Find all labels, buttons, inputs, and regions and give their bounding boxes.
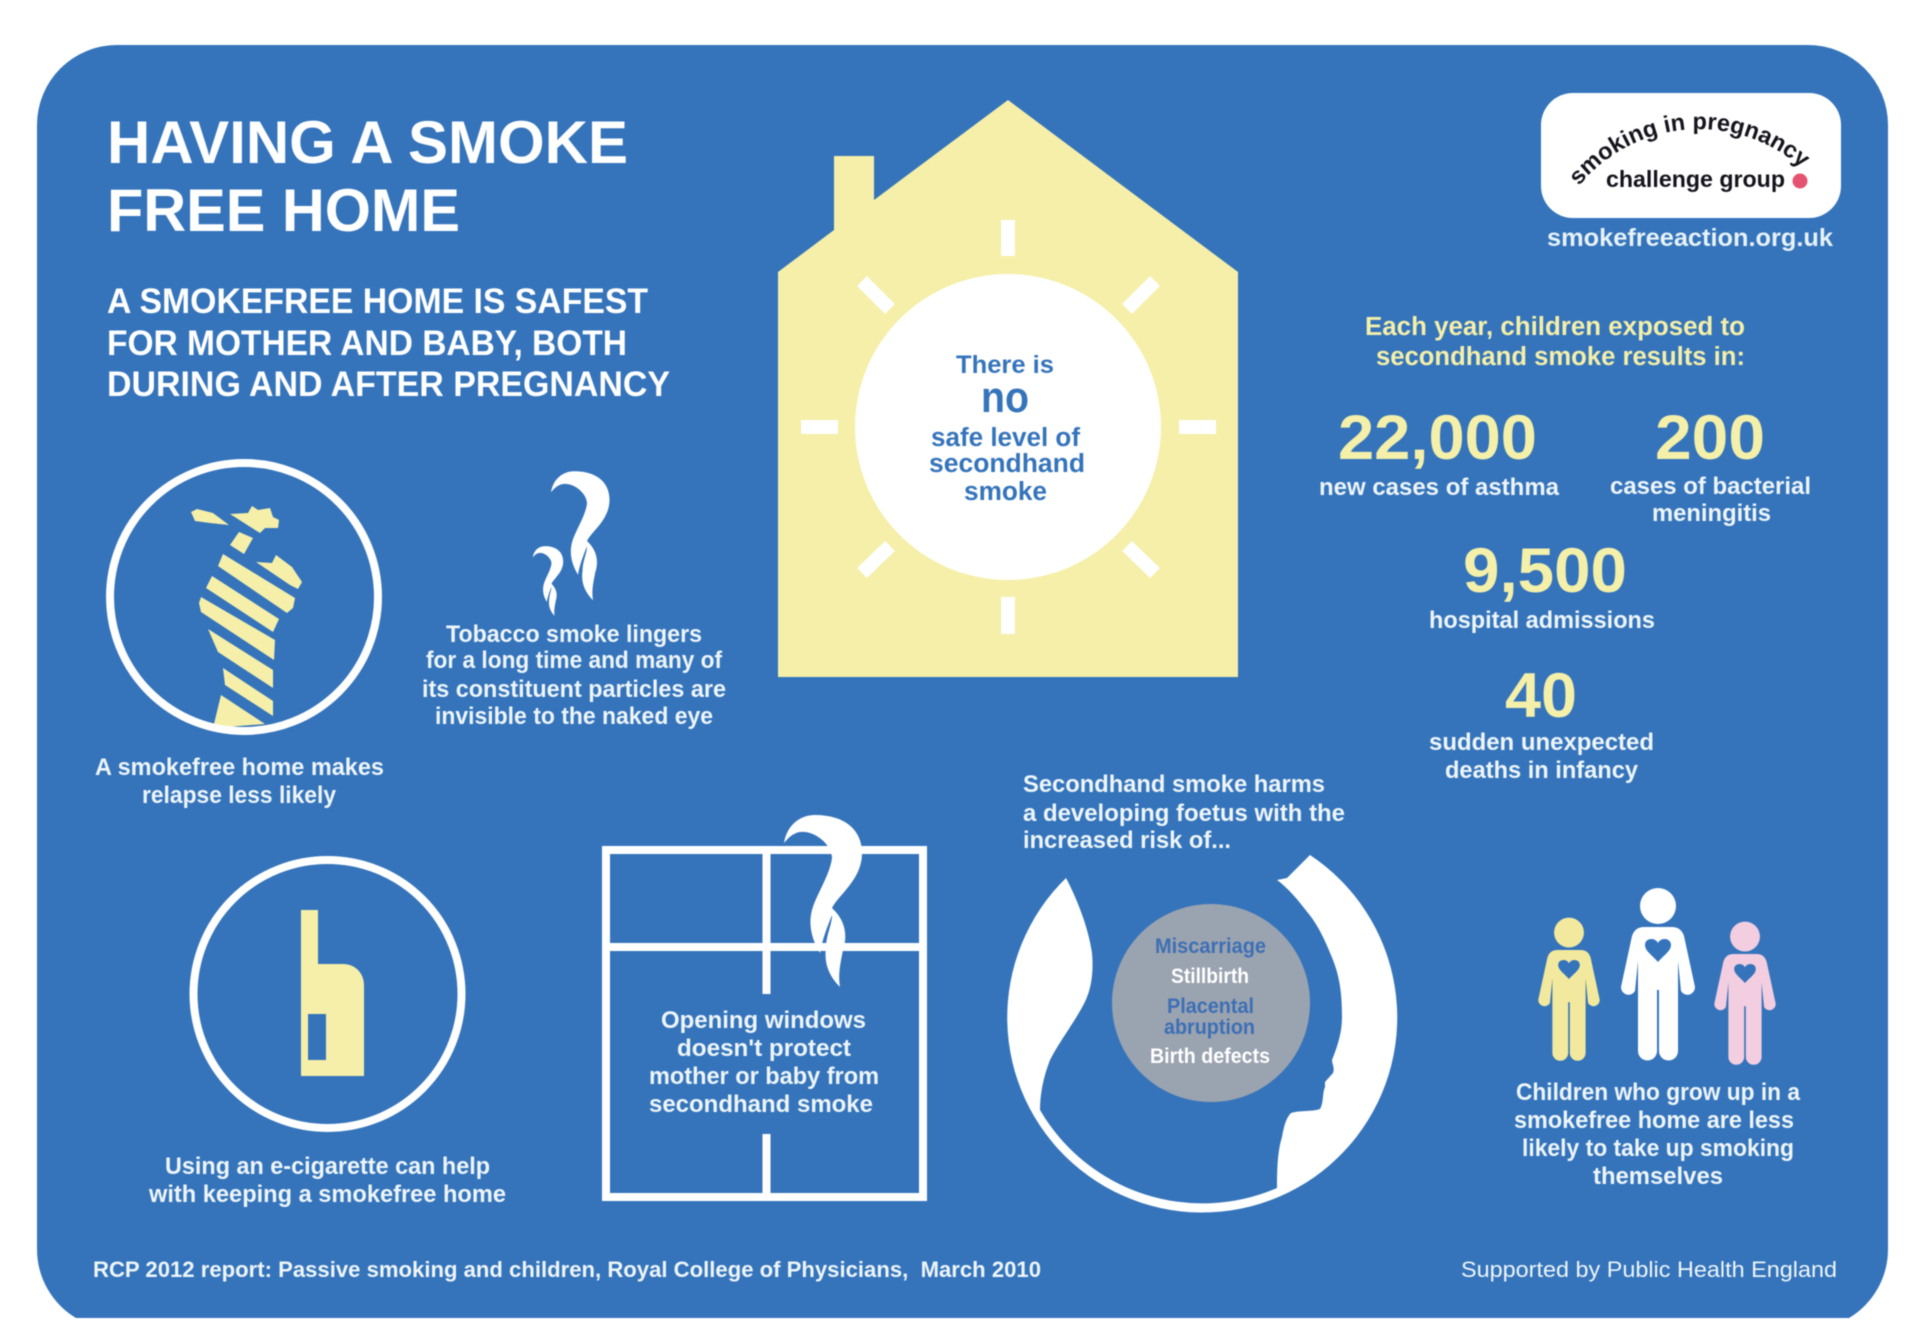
text: e-cigarette [148, 1153, 506, 1208]
text: opening windows: secondhand smoke [649, 1091, 873, 1118]
panel: risks grey circle [1112, 904, 1310, 1102]
text: e-cigarette: with keeping a smokefree home [148, 1181, 506, 1208]
text: tobacco smoke lingers [422, 621, 726, 730]
website url: smokefreeaction.org.uk [1547, 224, 1833, 252]
title: FREE HOME [107, 177, 460, 244]
text: secondhand smoke harms: a developing foetus with the [1023, 800, 1345, 827]
stat: 200 meningitis: meningitis [1652, 500, 1771, 527]
panel: risks grey circle: Placental [1167, 995, 1254, 1018]
title: HAVING A SMOKE [107, 109, 628, 176]
stat: 9,500 hospital admissions [1429, 536, 1655, 634]
stat: 200 meningitis: cases of bacterial [1610, 473, 1811, 500]
text: relapse: A smokefree home makes [95, 754, 384, 781]
icon: hand refusing cigarette in circle [110, 463, 378, 731]
panel: risks grey circle: Miscarriage [1155, 935, 1266, 958]
subtitle: DURING AND AFTER PREGNANCY [107, 365, 670, 404]
stat: 9,500 hospital admissions: hospital admissions [1429, 607, 1655, 634]
stat: 22,000 asthma: 22,000 [1338, 403, 1537, 473]
text: opening windows: mother or baby from [649, 1063, 879, 1090]
text: children: likely to take up smoking [1522, 1135, 1794, 1162]
icon: window with smoke [606, 815, 923, 1197]
text: children: Children who grow up in a [1516, 1079, 1800, 1106]
stat: 22,000 asthma [1319, 403, 1559, 501]
logo: smoking in pregnancy challenge group [1540, 92, 1842, 219]
text: secondhand smoke harms: Secondhand smoke harms [1023, 771, 1325, 798]
text: children: themselves [1593, 1163, 1723, 1190]
icon: e-cigarette in circle [194, 860, 462, 1128]
icon: smoke wisps [533, 471, 610, 616]
stat: 200 meningitis: 200 [1655, 403, 1765, 473]
panel: risks grey circle: Birth defects [1150, 1045, 1270, 1068]
panel: risks grey circle: abruption [1164, 1016, 1255, 1039]
text: secondhand smoke harms [1023, 771, 1345, 854]
text: relapse [95, 754, 384, 809]
stat: 9,500 hospital admissions: 9,500 [1463, 536, 1627, 606]
text: tobacco smoke lingers: its constituent particles are [422, 676, 726, 703]
title [107, 109, 628, 244]
text: relapse: relapse less likely [142, 782, 336, 809]
text: no safe level: smoke [964, 478, 1047, 506]
text: no safe level: secondhand [929, 450, 1085, 478]
subtitle [107, 282, 670, 404]
logo: smoking in pregnancy challenge group: smoking in pregnancy [1571, 114, 1810, 185]
text: no safe level: safe level of [931, 424, 1081, 452]
stat: 40 sudden deaths: sudden unexpected [1429, 729, 1654, 756]
statistics intro: Each year, children exposed to [1365, 313, 1745, 341]
stat: 22,000 asthma: new cases of asthma [1319, 474, 1559, 501]
text: children [1514, 1079, 1800, 1190]
text: tobacco smoke lingers: invisible to the naked eye [435, 703, 713, 730]
icon: pregnant silhouette in circle [1007, 855, 1397, 1213]
text: children: smokefree home are less [1514, 1107, 1794, 1134]
statistics intro [1365, 313, 1745, 371]
stat: 40 sudden deaths: deaths in infancy [1445, 757, 1638, 784]
icon: sun circle with rays [801, 220, 1216, 634]
statistics intro: secondhand smoke results in: [1376, 343, 1745, 371]
text: e-cigarette: Using an e-cigarette can help [165, 1153, 490, 1180]
panel: risks grey circle: Stillbirth [1171, 965, 1249, 988]
panel: house [778, 100, 1238, 677]
text: opening windows: Opening windows [661, 1007, 866, 1034]
stat: 200 meningitis [1610, 403, 1811, 527]
logo: smoking in pregnancy challenge group: challenge group [1606, 166, 1785, 192]
stat: 40 sudden deaths: 40 [1505, 661, 1577, 731]
text: no safe level: no [981, 373, 1029, 422]
text: no safe level [929, 351, 1085, 506]
icon: three people with hearts [1538, 888, 1776, 1065]
subtitle: FOR MOTHER AND BABY, BOTH [107, 324, 627, 363]
text: tobacco smoke lingers: Tobacco smoke lingers [446, 621, 702, 648]
icon: house shape [778, 100, 1238, 677]
footer support: Supported by Public Health England [1461, 1257, 1837, 1282]
text: opening windows: doesn't protect [677, 1035, 851, 1062]
text: no safe level: There is [956, 351, 1054, 379]
subtitle: A SMOKEFREE HOME IS SAFEST [107, 282, 648, 321]
text: opening windows [649, 1007, 879, 1118]
footer source: RCP 2012 report: Passive smoking and children, Royal College of Physicians, March 2010 [93, 1257, 1041, 1282]
text: tobacco smoke lingers: for a long time and many of [426, 647, 723, 674]
text: secondhand smoke harms: increased risk of... [1023, 827, 1231, 854]
stat: 40 sudden deaths [1429, 661, 1654, 784]
